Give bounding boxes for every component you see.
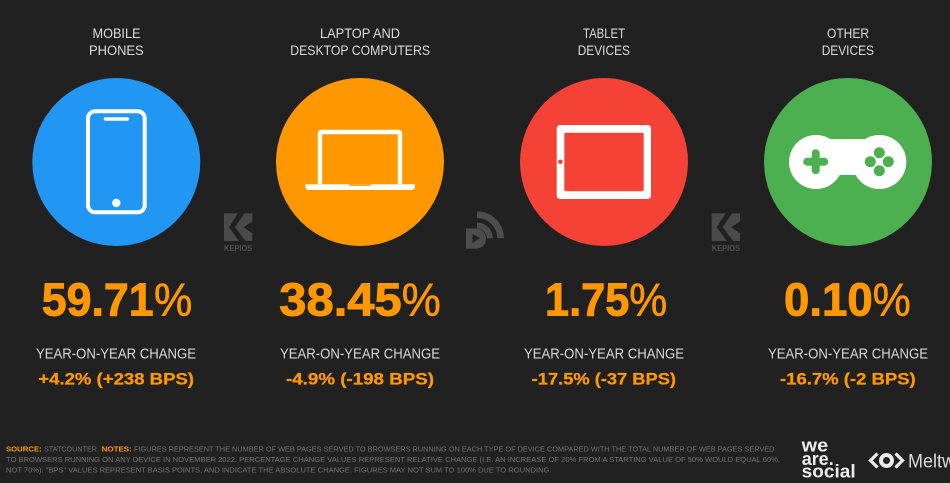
footnote: source and notes: SOURCE: <box>6 444 42 454</box>
logo: Kepios right <box>712 213 741 253</box>
footnote: source and notes <box>6 444 780 474</box>
heading: tablet devices: TABLET <box>583 25 625 41</box>
label: year-on-year change: YEAR-ON-YEAR CHANGE <box>768 346 928 362</box>
circle: blue <box>32 78 200 246</box>
panel: other devices <box>764 25 932 388</box>
value: mobile share: % <box>154 274 192 326</box>
value: mobile share: 59.71 <box>42 274 154 326</box>
footnote: source and notes: NOTES: <box>102 444 132 454</box>
circle: red <box>520 78 688 246</box>
label: year-on-year change: YEAR-ON-YEAR CHANGE <box>280 346 440 362</box>
circle: green <box>764 78 932 246</box>
change: tablet: -17.5% (-37 BPS) <box>532 370 676 388</box>
logo: We Are Social: are. <box>802 449 834 469</box>
label: year-on-year change: YEAR-ON-YEAR CHANGE <box>36 346 196 362</box>
logo: Kepios left: KEPIOS <box>224 244 253 253</box>
heading: laptop and desktop computers: DESKTOP COMPUTERS <box>290 42 430 58</box>
logo: We Are Social: we <box>801 436 828 456</box>
heading: other devices: OTHER <box>827 25 869 41</box>
heading: mobile phones: MOBILE <box>92 25 140 41</box>
change: laptop: -4.9% (-198 BPS) <box>286 370 434 388</box>
heading: other devices: DEVICES <box>822 42 874 58</box>
value: laptop share: % <box>402 274 441 326</box>
footnote: source and notes: TO BROWSERS RUNNING ON ANY DEVICE IN NOVEMBER 2022. PERCENTAGE CHANGE VALUES REPRESENT RELATIVE CHANGE (I.E. AN INCREASE OF 20% FROM A STARTING VALUE OF 50% WOULD EQUAL 60%, <box>6 455 780 464</box>
logo: Kepios right: KEPIOS <box>712 244 741 253</box>
label: year-on-year change: YEAR-ON-YEAR CHANGE <box>524 346 684 362</box>
logo: Kepios left <box>224 213 253 253</box>
circle: orange <box>276 78 444 246</box>
change: mobile: +4.2% (+238 BPS) <box>38 370 194 388</box>
heading: laptop and desktop computers: LAPTOP AND <box>320 25 400 41</box>
heading: mobile phones: PHONES <box>89 42 144 58</box>
icon: tablet <box>557 125 651 199</box>
logo: DataReportal <box>466 215 501 249</box>
logo: We Are Social: social <box>802 462 856 482</box>
footnote: source and notes: STATCOUNTER. <box>44 444 99 454</box>
value: tablet share: 1.75 <box>545 274 629 326</box>
value: tablet share: % <box>629 274 667 326</box>
footnote: source and notes: FIGURES REPRESENT THE NUMBER OF WEB PAGES SERVED TO BROWSERS RUNNING ON EACH TYPE OF DEVICE COMPARED WITH THE TOTAL NUMBER OF WEB PAGES SERVED <box>134 444 774 454</box>
change: other: -16.7% (-2 BPS) <box>780 370 916 388</box>
heading: tablet devices: DEVICES <box>578 42 630 58</box>
value: laptop share: 38.45 <box>279 274 402 326</box>
icon: game controller <box>789 135 906 189</box>
value: other share: 0.10 <box>784 274 873 326</box>
logo: We Are Social <box>801 436 856 482</box>
icon: laptop <box>305 132 415 190</box>
footnote: source and notes: NOT 70%). "BPS" VALUES REPRESENT BASIS POINTS, AND INDICATE THE ABSOLUTE CHANGE. FIGURES MAY NOT SUM TO 100% DUE TO ROUNDING. <box>6 466 552 474</box>
value: other share: % <box>873 274 911 326</box>
logo: Meltwater <box>870 450 950 472</box>
panel: laptop and desktop computers <box>276 25 444 388</box>
icon: smartphone <box>88 111 145 212</box>
panel: mobile phones <box>32 25 200 388</box>
panel: tablet devices <box>520 25 688 388</box>
